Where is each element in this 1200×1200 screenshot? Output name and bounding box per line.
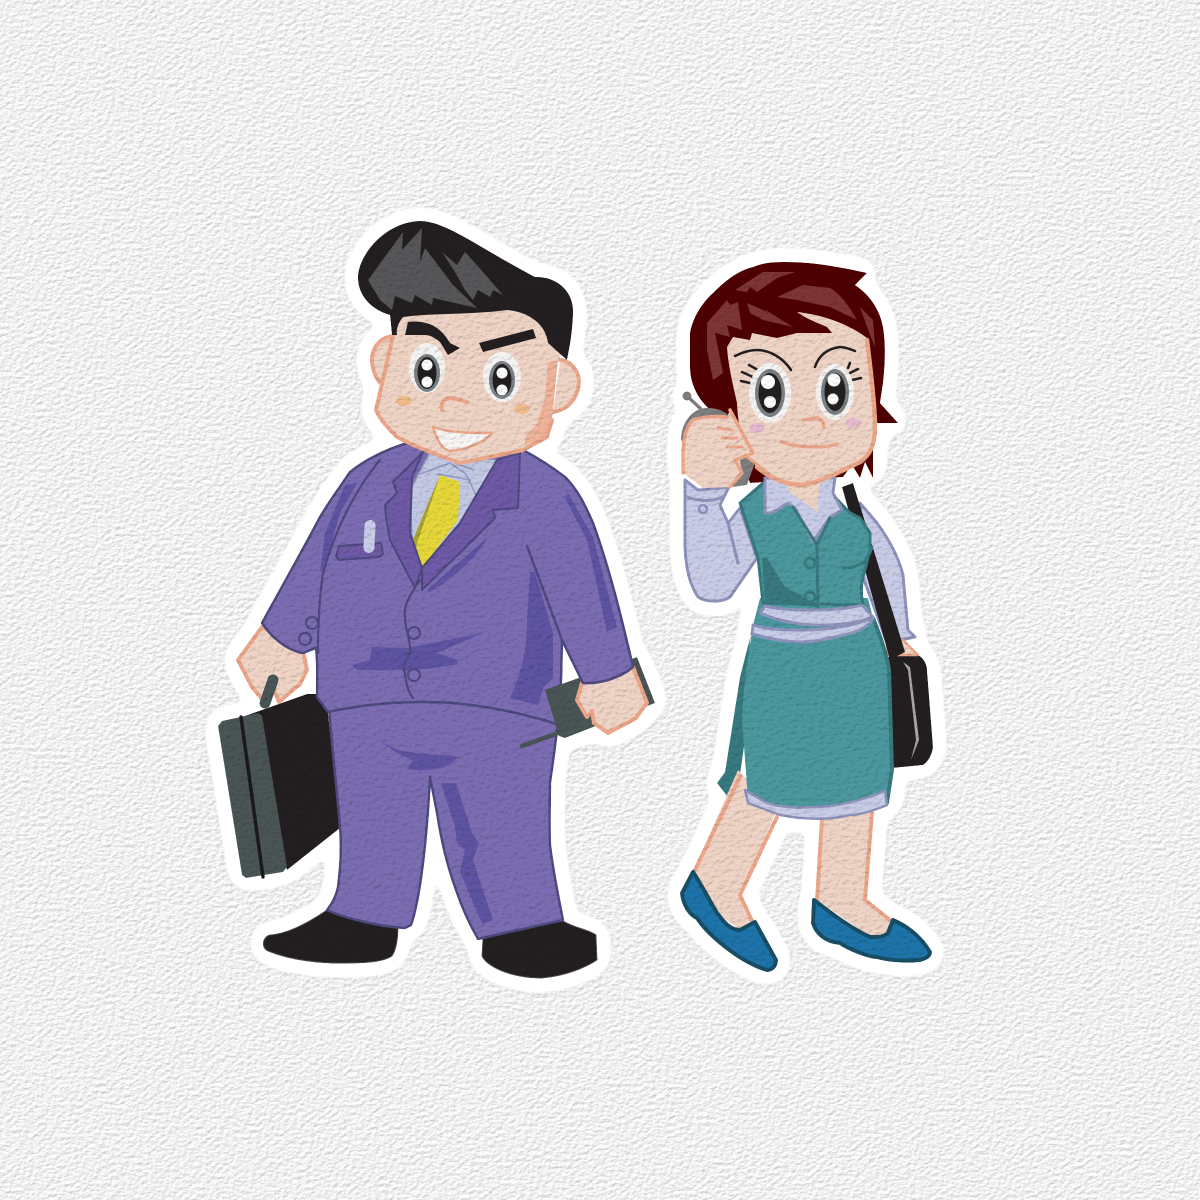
head: woman	[727, 312, 875, 485]
eyebrows and lashes: woman	[735, 347, 861, 383]
neck	[787, 480, 820, 512]
left sleeve: woman	[685, 480, 757, 601]
jacket buttons	[299, 617, 420, 681]
icon: mobile phone in hand	[522, 657, 655, 746]
trouser crease shadows	[382, 742, 493, 924]
ears: man	[372, 336, 579, 412]
bag strap	[842, 483, 905, 660]
pen	[363, 520, 376, 553]
hair: man	[358, 221, 573, 360]
waist belt bands	[752, 605, 873, 642]
shirt collar	[765, 478, 842, 542]
collar lines	[420, 463, 476, 495]
vest	[740, 478, 872, 610]
trousers	[327, 695, 563, 939]
eyebrows: man	[405, 321, 536, 355]
jacket seams	[318, 460, 422, 698]
shoes: woman	[682, 872, 930, 970]
tie side shade	[412, 475, 440, 546]
skirt hem band	[745, 790, 887, 819]
hair back: woman	[690, 262, 898, 483]
breast pocket	[336, 543, 383, 560]
fingers	[718, 428, 770, 475]
shoes: man	[263, 910, 597, 978]
cuff button	[699, 505, 707, 513]
character: businessman sticker	[218, 221, 655, 978]
briefcase handle	[265, 680, 273, 703]
right sleeve: woman	[860, 503, 918, 655]
shoulder bag	[888, 652, 933, 768]
eyes: woman	[749, 363, 854, 423]
face shade	[525, 360, 558, 445]
right sleeve	[527, 477, 633, 683]
sleeve highlight	[565, 493, 617, 632]
yellow necktie	[412, 475, 460, 567]
icon: briefcase	[218, 694, 340, 878]
jacket shadows	[320, 483, 553, 705]
shirt	[410, 452, 497, 567]
left lapel	[385, 452, 423, 588]
left hand: man	[238, 627, 307, 702]
back of skirt with slit	[717, 630, 752, 796]
vest shadow	[762, 558, 818, 607]
right lapel	[422, 453, 520, 590]
eyes: man	[409, 343, 521, 402]
vest buttons	[805, 558, 815, 602]
jaw outline	[376, 336, 552, 463]
vest neckline and seams	[793, 507, 872, 610]
character: businesswoman sticker	[681, 262, 933, 970]
right hand: man	[577, 667, 647, 733]
cheeks, nose and smile: woman	[749, 418, 861, 447]
right hand: woman	[887, 640, 918, 655]
hand holding phone: woman	[683, 410, 770, 488]
leg fill	[693, 770, 890, 937]
head: man	[376, 295, 565, 463]
purple suit jacket	[262, 443, 633, 725]
teal skirt	[742, 598, 892, 819]
cheeks, nose and smile: man	[396, 396, 530, 451]
icon: mobile phone at ear	[681, 392, 757, 487]
leg outline	[695, 777, 890, 923]
hair highlights: woman	[707, 272, 875, 380]
